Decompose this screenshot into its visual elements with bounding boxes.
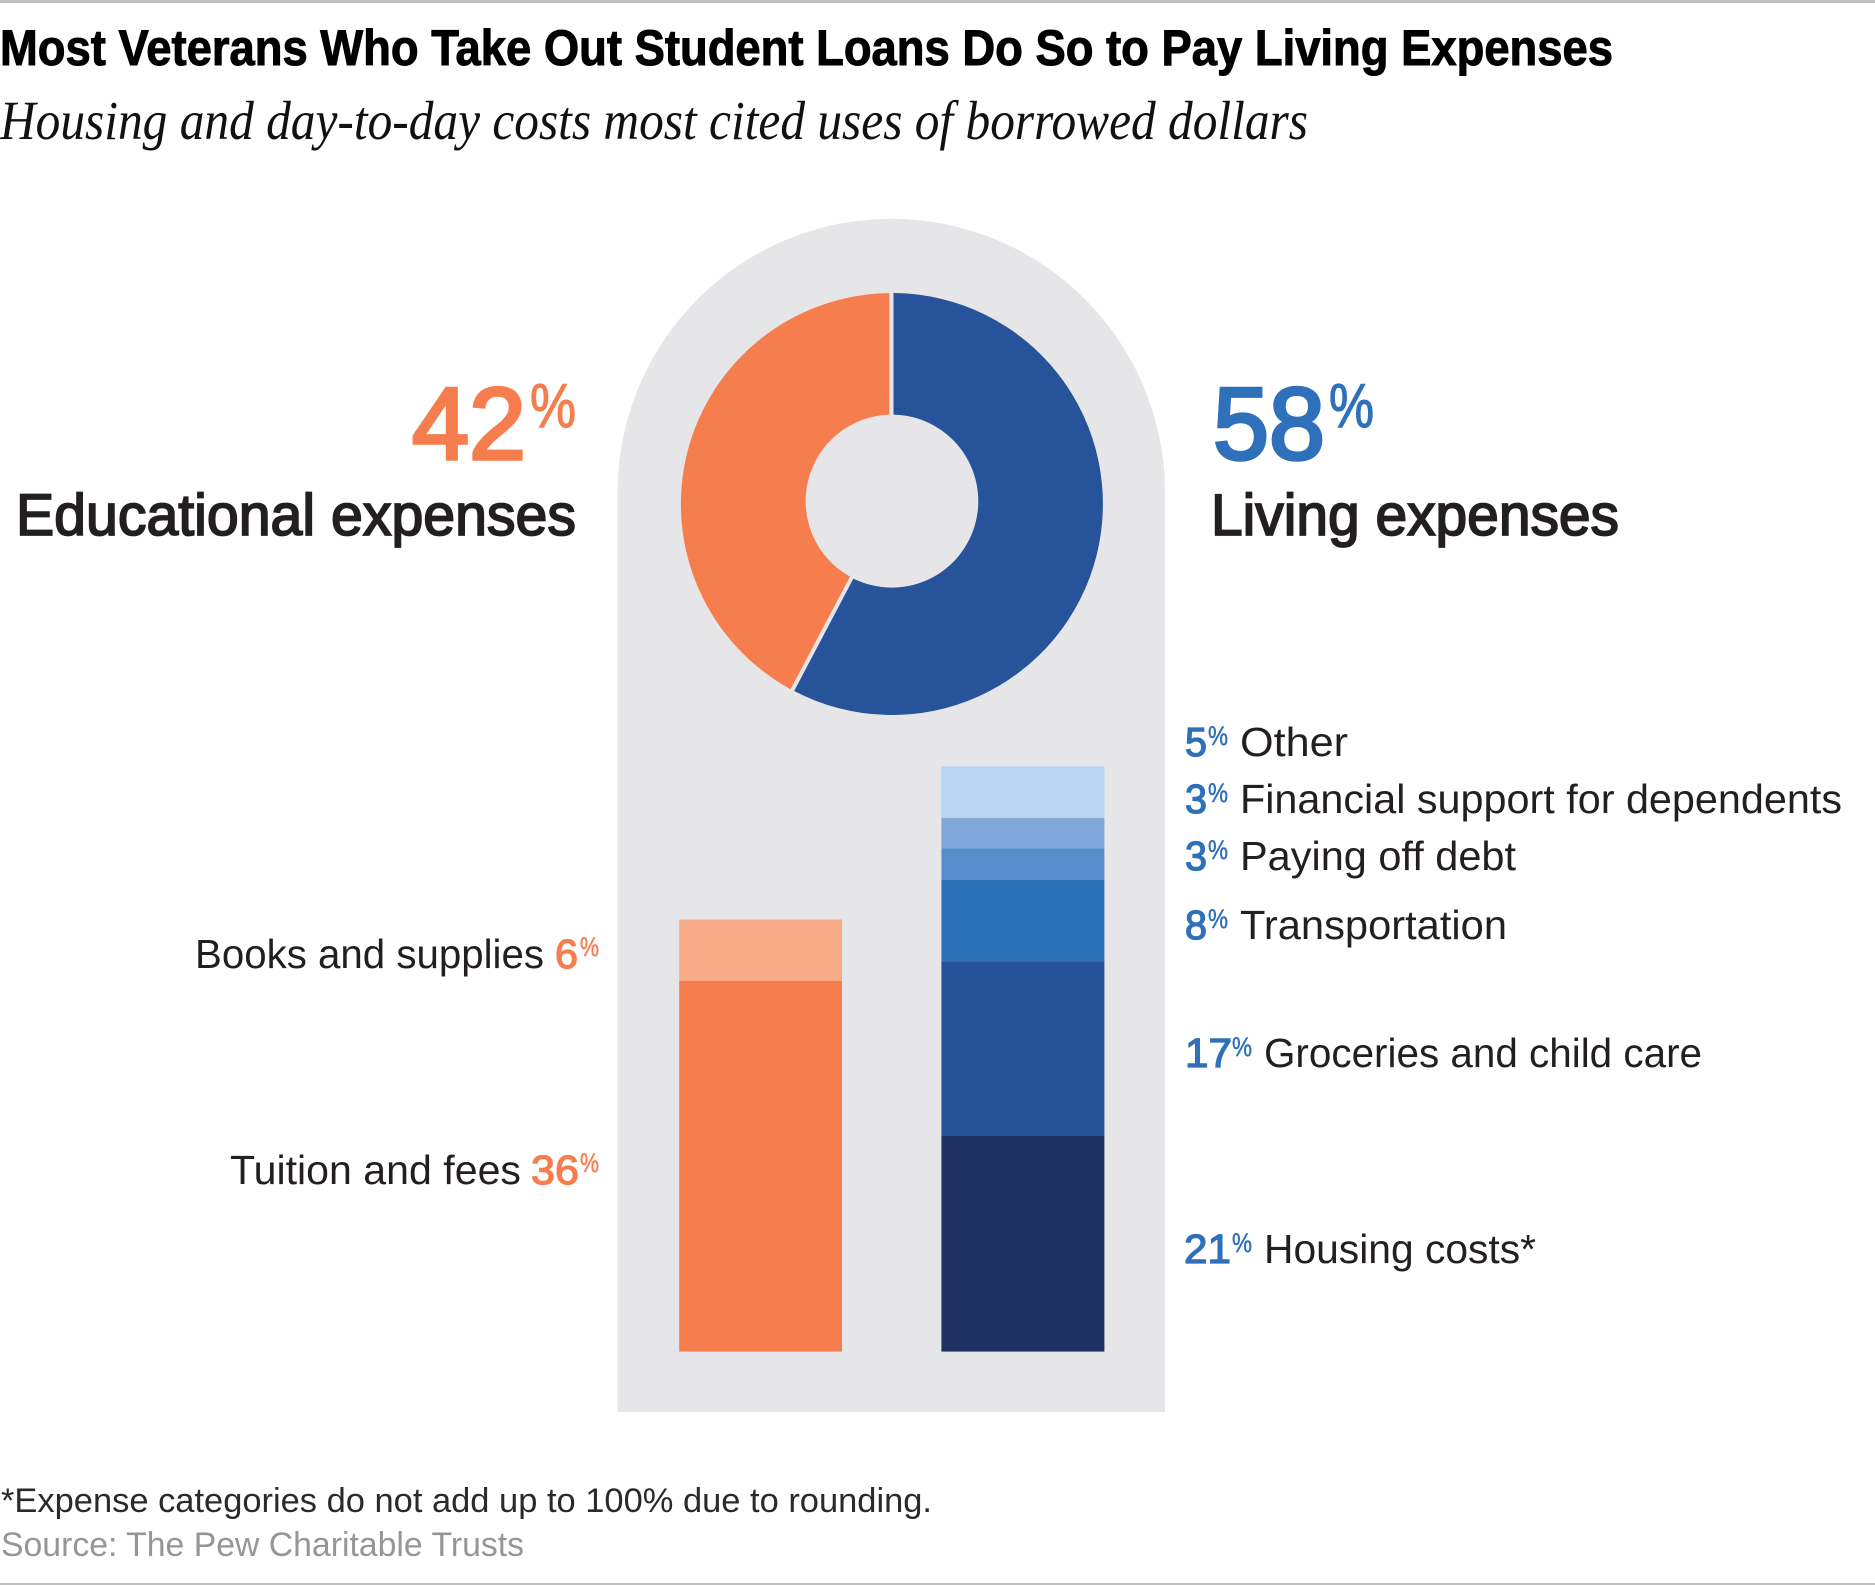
label: transportation 8%: 8 bbox=[1185, 902, 1207, 948]
label: other 5%: 5 bbox=[1185, 719, 1207, 765]
heading: educational expenses: Educational expenses bbox=[16, 483, 576, 548]
label: transportation 8%: Transportation bbox=[1240, 902, 1507, 948]
donut segment: educational expenses 42% bbox=[681, 293, 889, 689]
label: transportation 8%: % bbox=[1208, 904, 1228, 934]
label: tuition and fees 36%: Tuition and fees bbox=[230, 1147, 521, 1193]
source: Source: The Pew Charitable Trusts bbox=[1, 1526, 524, 1564]
label: groceries and child care 17%: % bbox=[1232, 1032, 1252, 1062]
stacked bar: living expenses bbox=[941, 766, 1104, 1352]
label: books and supplies 6%: 6 bbox=[555, 931, 578, 977]
label: other 5%: % bbox=[1208, 721, 1228, 751]
label: paying off debt 3%: Paying off debt bbox=[1240, 833, 1517, 879]
footnote: *Expense categories do not add up to 100% due to rounding. bbox=[1, 1482, 932, 1520]
label: books and supplies 6%: Books and supplies bbox=[195, 931, 544, 977]
callout: 42 percent: 42 bbox=[412, 367, 526, 481]
callout: 58 percent: % bbox=[1329, 372, 1374, 441]
label: housing costs 21%: 21 bbox=[1184, 1226, 1231, 1272]
label: paying off debt 3%: % bbox=[1208, 835, 1228, 865]
label: financial support for dependents 3%: 3 bbox=[1185, 776, 1207, 822]
label: housing costs 21%: % bbox=[1232, 1228, 1252, 1258]
label: tuition and fees 36%: % bbox=[580, 1148, 599, 1178]
label: housing costs 21%: Housing costs* bbox=[1264, 1226, 1536, 1272]
label: other 5% bbox=[1185, 719, 1348, 765]
label: financial support for dependents 3%: % bbox=[1208, 778, 1228, 808]
label: financial support for dependents 3%: Financial support for dependents bbox=[1240, 776, 1842, 822]
panel: arched grey background bbox=[618, 219, 1165, 1412]
label: tuition and fees 36%: 36 bbox=[531, 1147, 579, 1193]
callout: 42 percent: % bbox=[530, 372, 576, 441]
title: Most Veterans Who Take Out Student Loans Do So to Pay Living Expenses bbox=[0, 20, 1613, 76]
subtitle: Housing and day-to-day costs most cited uses of borrowed dollars bbox=[0, 90, 1308, 151]
callout: 42 percent bbox=[412, 367, 576, 481]
heading: living expenses: Living expenses bbox=[1211, 483, 1619, 548]
stacked bar: educational expenses bbox=[679, 920, 842, 1352]
label: groceries and child care 17%: Groceries and child care bbox=[1264, 1030, 1702, 1076]
donut chart: educational vs living expenses bbox=[681, 293, 1103, 715]
donut segment: living expenses 58% bbox=[794, 293, 1103, 715]
label: paying off debt 3%: 3 bbox=[1185, 833, 1207, 879]
label: other 5%: Other bbox=[1240, 719, 1348, 765]
label: books and supplies 6%: % bbox=[580, 932, 599, 962]
label: groceries and child care 17%: 17 bbox=[1185, 1030, 1232, 1076]
callout: 58 percent: 58 bbox=[1213, 367, 1325, 481]
